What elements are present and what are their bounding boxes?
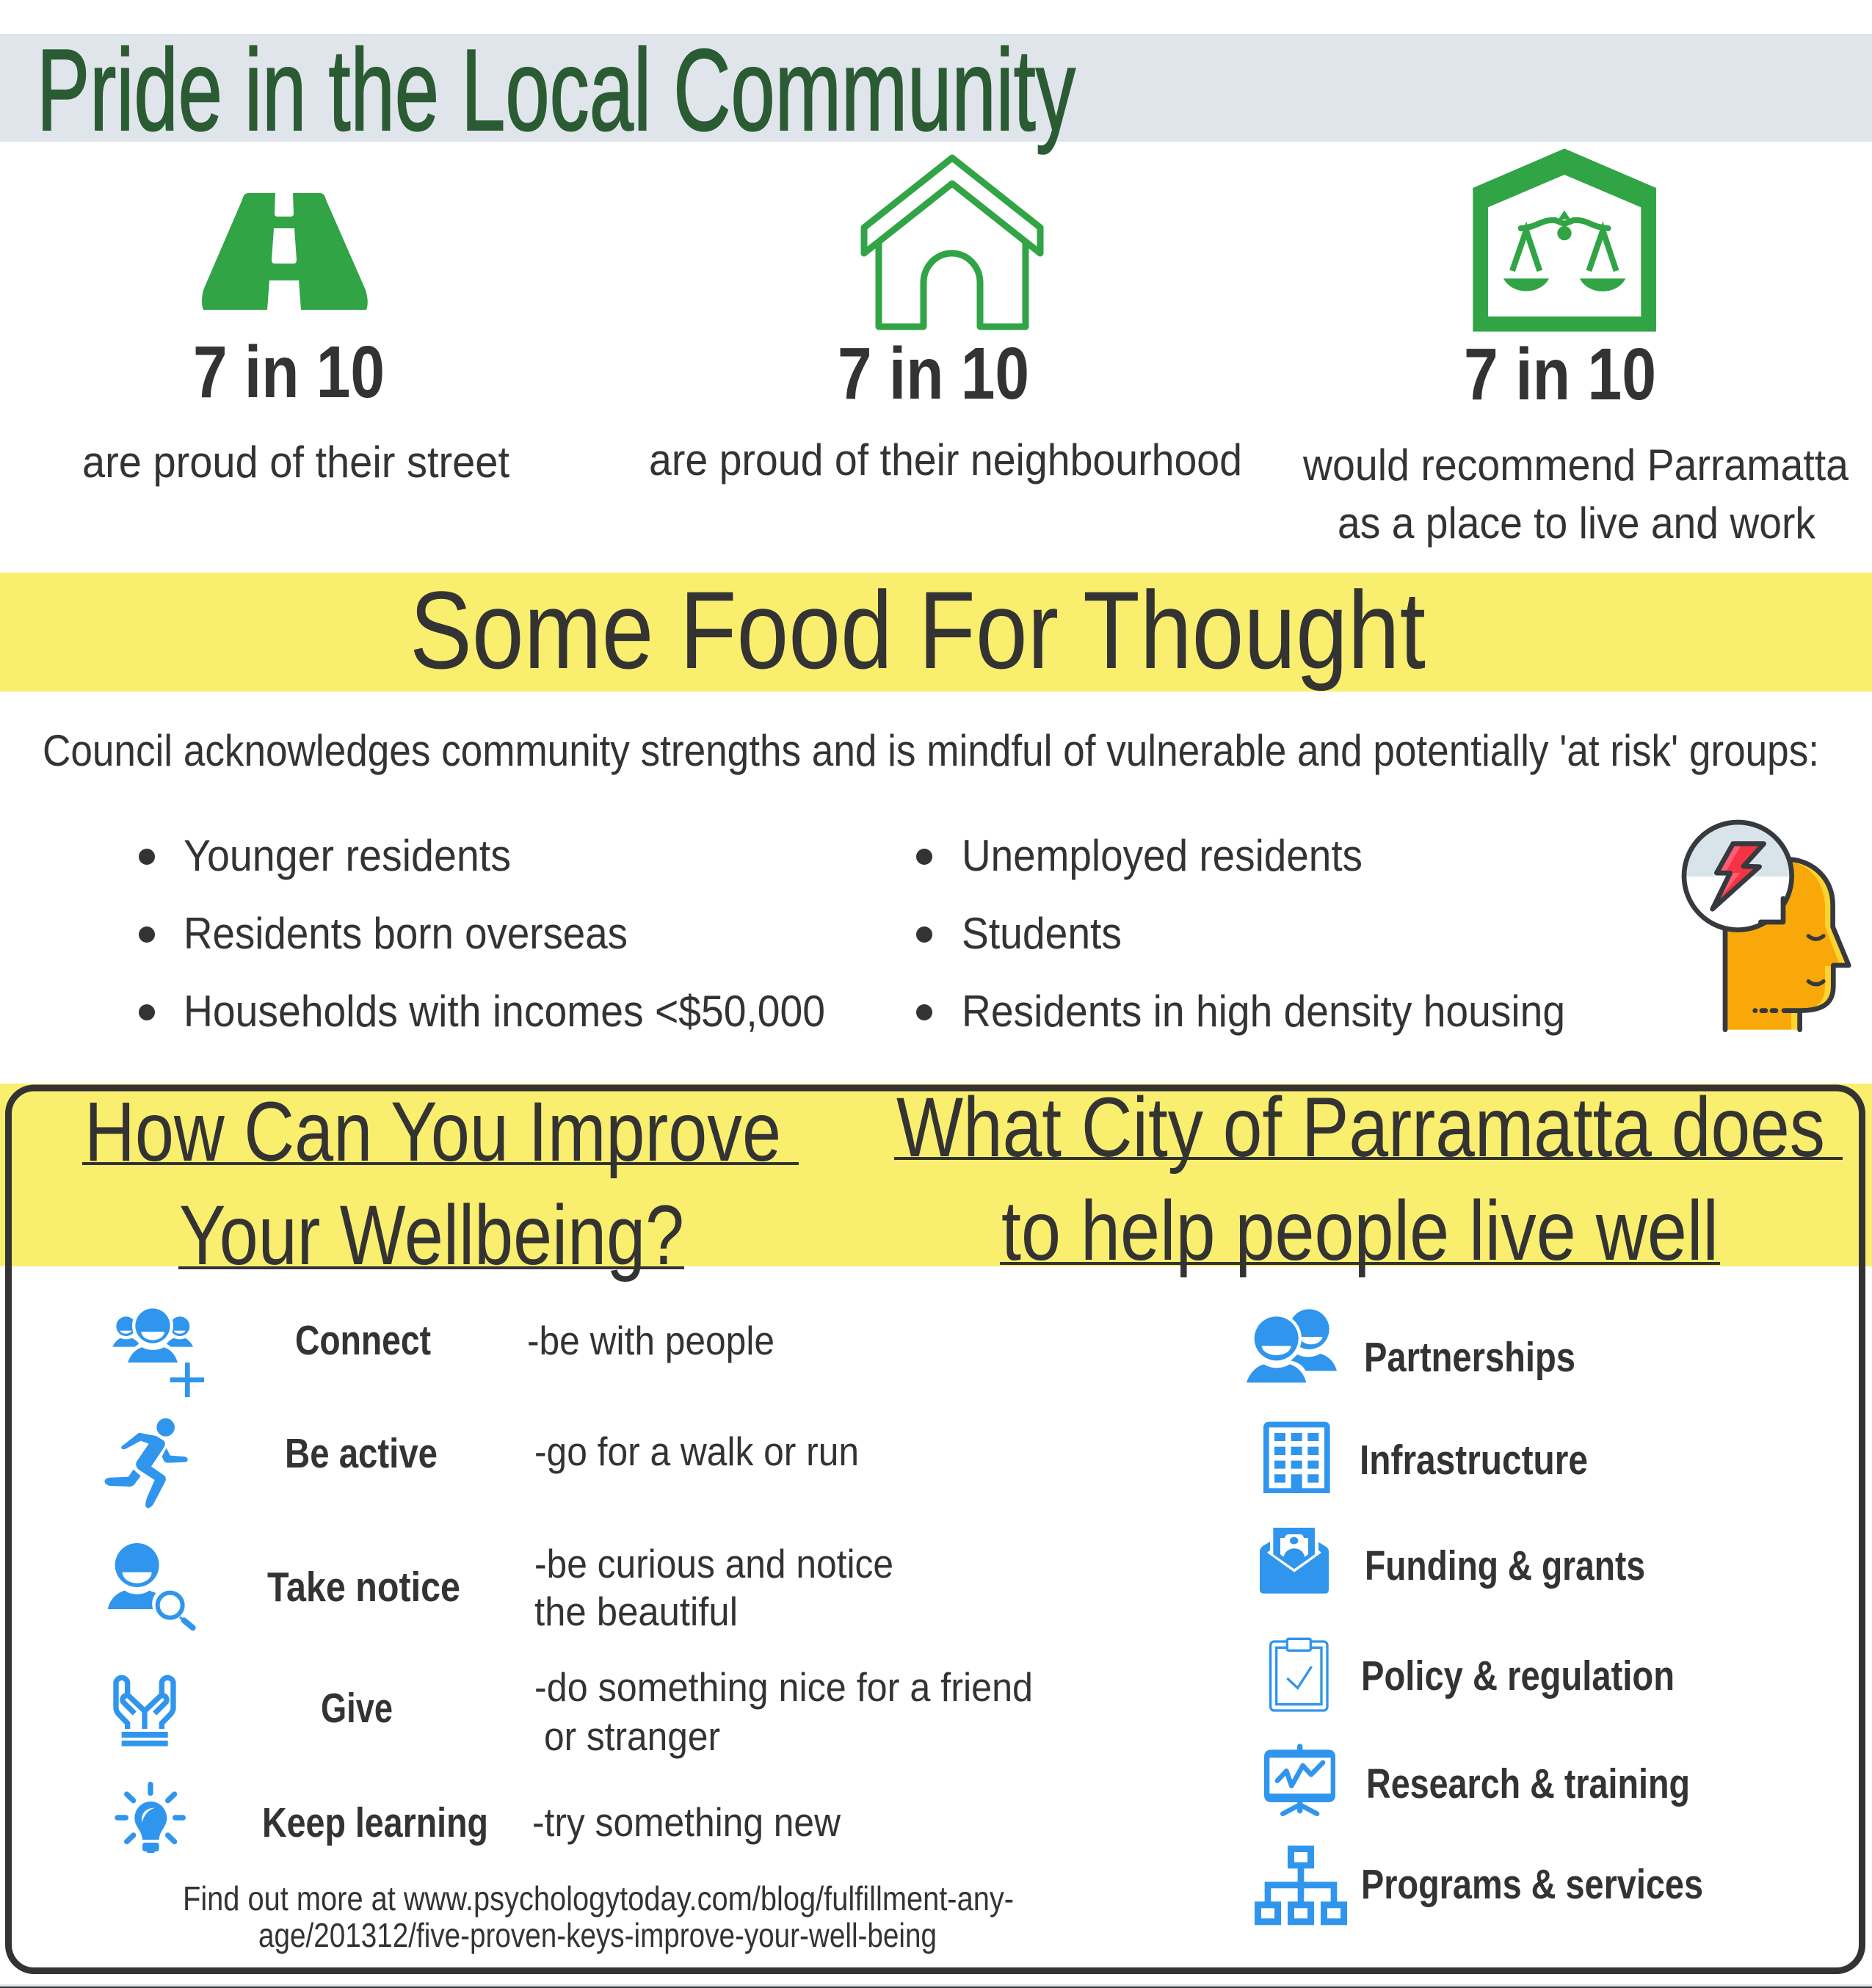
heading: how can you improve: [82, 1085, 799, 1283]
icon: light bulb: [117, 1785, 183, 1853]
text: do something nice: or stranger: [544, 1713, 720, 1759]
label: take notice: Take notice: [267, 1564, 460, 1611]
label: give: Give: [321, 1685, 393, 1732]
icon: runner: [104, 1418, 188, 1508]
bullet list: right: Students: [962, 909, 1122, 958]
footer link text: [183, 1879, 1014, 1954]
icon: partnerships: [1247, 1309, 1337, 1382]
icon: funding: [1260, 1528, 1329, 1594]
icon: road: [202, 193, 368, 310]
label: programs: Programs & services: [1361, 1861, 1703, 1908]
bullet list: left: Households with incomes <$50,000: [184, 987, 825, 1036]
stat: recommend: 7 in 10: [1464, 333, 1656, 416]
title: Pride in the Local Community: [37, 26, 1075, 155]
text: be curious: -be curious and notice: [534, 1541, 893, 1586]
icon: infrastructure: [1263, 1422, 1330, 1493]
bullet list: left: Younger residents: [184, 831, 511, 880]
stat: neighbourhood: 7 in 10: [838, 333, 1029, 415]
title band: [0, 34, 1872, 142]
icon: policy clipboard: [1271, 1639, 1327, 1711]
icon: research presentation: [1264, 1746, 1335, 1814]
stat: street: 7 in 10: [193, 331, 385, 413]
text: be curious: [534, 1541, 893, 1634]
panel border: [9, 1088, 1862, 1970]
text: go for a walk: -go for a walk or run: [534, 1429, 859, 1474]
label: connect: Connect: [295, 1317, 431, 1364]
icon: programs org chart: [1255, 1846, 1347, 1925]
heading: what city of parramatta does: to help people live well: [1001, 1184, 1719, 1278]
icon: house: [864, 158, 1040, 327]
heading: Some Food For Thought: [410, 568, 1426, 692]
icon: connect: [112, 1305, 204, 1397]
label: research: Research & training: [1366, 1760, 1690, 1807]
label: partnerships: Partnerships: [1364, 1334, 1575, 1381]
icon: giving hands: [116, 1677, 173, 1746]
footer link text: Find out more at www.psychologytoday.com/blog/fulfillment-any-: [183, 1879, 1014, 1918]
caption: recommend line 2: as a place to live and work: [1338, 498, 1816, 548]
bullet list: left: Residents born overseas: [184, 909, 628, 958]
yellow header band: [0, 1084, 1872, 1266]
panel: pride in the local community: [0, 26, 1872, 548]
text: be curious: the beautiful: [534, 1589, 738, 1634]
heading: how can you improve: How Can You Improve: [84, 1085, 781, 1179]
bullet list: right: Residents in high density housing: [962, 987, 1565, 1036]
panel: some food for thought: [0, 568, 1872, 1036]
label: infrastructure: Infrastructure: [1360, 1437, 1588, 1484]
heading: what city of parramatta does: [894, 1081, 1843, 1278]
panel: wellbeing: [0, 1081, 1872, 1970]
text: do something nice: [534, 1664, 1033, 1759]
icon: scales in house: [1473, 148, 1656, 332]
icon: take notice: [108, 1543, 193, 1628]
footer link text: age/201312/five-proven-keys-improve-your-well-being: [258, 1916, 937, 1954]
bottom edge strip: [0, 1984, 1872, 1988]
label: policy: Policy & regulation: [1361, 1653, 1675, 1699]
caption: neighbourhood: are proud of their neighbourhood: [649, 435, 1242, 485]
heading: how can you improve: Your Wellbeing?: [179, 1189, 684, 1283]
bullet list: left: [139, 831, 825, 1036]
label: funding: Funding & grants: [1365, 1542, 1645, 1589]
text: be with people: -be with people: [527, 1318, 774, 1363]
bullet list: right: [916, 831, 1565, 1036]
text: do something nice: -do something nice for a friend: [534, 1664, 1033, 1710]
label: be active: Be active: [285, 1430, 438, 1477]
yellow band: [0, 573, 1872, 692]
label: keep learning: Keep learning: [262, 1799, 488, 1846]
bullet list: right: Unemployed residents: [962, 831, 1363, 880]
text: try something new: -try something new: [532, 1799, 841, 1845]
caption: street: are proud of their street: [82, 438, 509, 487]
icon: head with lightning bolt: [1684, 822, 1849, 1030]
